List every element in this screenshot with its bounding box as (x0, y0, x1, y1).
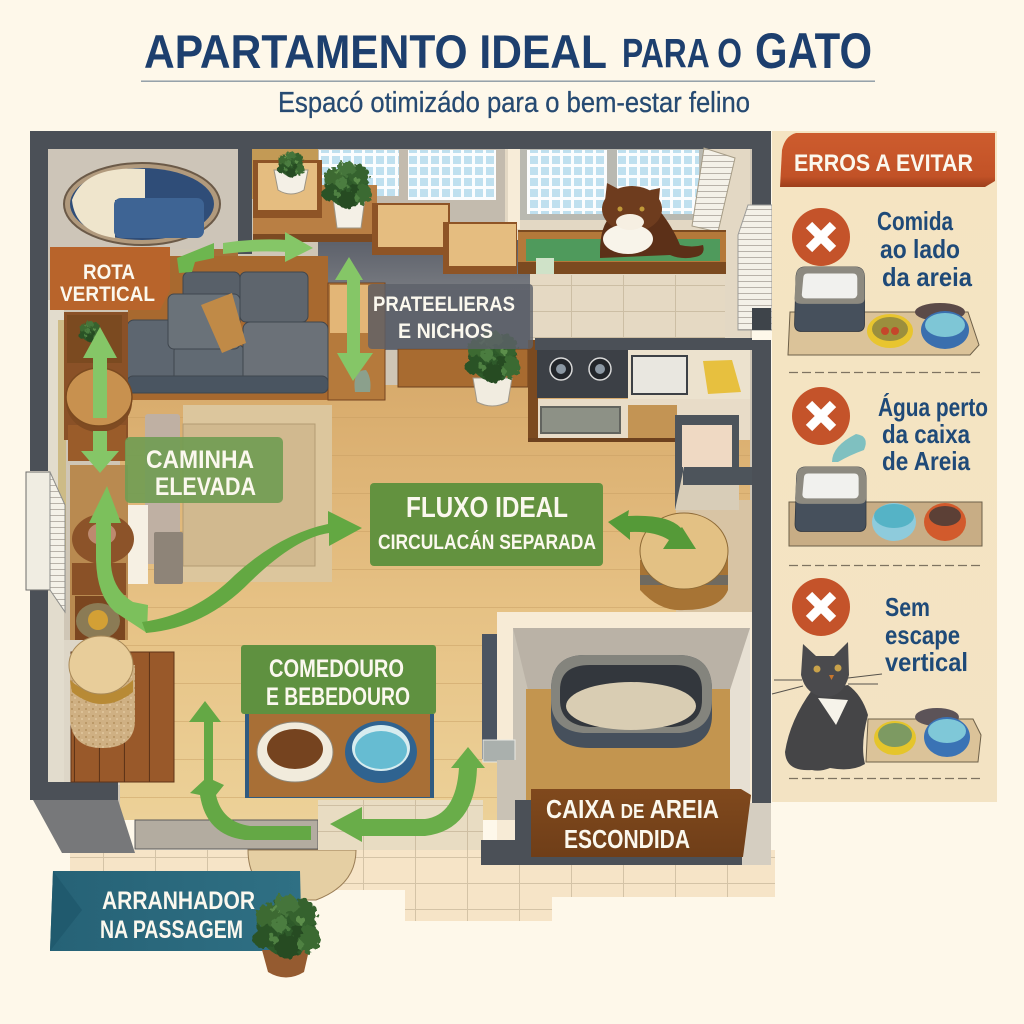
title: APARTAMENTO IDEAL (144, 25, 607, 78)
side window right (738, 205, 772, 330)
wooden scratching mat (71, 652, 174, 782)
label: fluxo ideal (370, 483, 603, 566)
arrow: shelves double (335, 257, 373, 381)
kitchen (528, 338, 752, 442)
banner (780, 133, 995, 187)
title: GATO (755, 23, 872, 79)
title: PARA O (622, 30, 742, 76)
panel: erros a evitar (772, 131, 997, 802)
sofa platform (128, 256, 528, 400)
label: arranhador na passagem (50, 871, 302, 951)
error 1: food next to litter (788, 206, 979, 355)
label: caminha elevada (125, 437, 283, 503)
label: caminha elevada: ELEVADA (155, 473, 256, 501)
bench with cushion (125, 414, 183, 584)
illustration: litter box, splash and bowls (789, 434, 982, 546)
error text: ao lado (880, 234, 960, 264)
label: prateleiras e nichos: PRATEELIERAS (373, 293, 515, 316)
x icon (792, 208, 850, 266)
error text: escape (885, 620, 960, 650)
lower left wall block (33, 800, 135, 853)
round wood stump (640, 513, 728, 610)
error text (877, 206, 972, 292)
cat bed (64, 163, 220, 245)
label: prateleiras e nichos: E NICHOS (398, 320, 493, 343)
error 3: no vertical escape (772, 578, 981, 771)
arrow: flow to stump (608, 510, 696, 549)
flow arrows (81, 232, 696, 842)
grey sofa (127, 272, 328, 393)
error text: Comida (877, 206, 953, 236)
error text (878, 392, 988, 476)
x icon (792, 387, 850, 445)
wall shelves (253, 160, 517, 274)
label: rota vertical (50, 247, 170, 310)
arrow: lower left (189, 701, 311, 840)
label: arranhador na passagem: ARRANHADOR (102, 887, 255, 915)
vertical furniture column (64, 312, 134, 640)
label: caixa de areia escondida: ESCONDIDA (564, 824, 690, 854)
label: prateleiras e nichos (368, 284, 533, 349)
arrow: vertical up (83, 327, 117, 418)
label: caminha elevada: CAMINHA (146, 446, 254, 474)
error 2: water near litter (789, 387, 988, 546)
green cat shelf (518, 230, 726, 274)
illustration: litter box and bowls (788, 267, 979, 355)
label: rota vertical: ROTA (83, 261, 135, 284)
error text: da areia (882, 262, 972, 292)
label: arranhador na passagem: NA PASSAGEM (100, 916, 243, 944)
banner: ERROS A EVITAR (794, 150, 973, 177)
error text: vertical (885, 647, 968, 677)
error text (885, 592, 968, 677)
error text: da caixa (882, 419, 970, 449)
threshold (135, 800, 483, 850)
side window left (26, 472, 65, 612)
label: caixa de areia escondida (531, 789, 751, 857)
illustration: black cat and bowls (772, 642, 981, 771)
litter box (551, 655, 712, 748)
outer walls (30, 131, 771, 803)
potted plant at entrance (253, 894, 321, 978)
label: fluxo ideal: CIRCULACÁN SEPARADA (378, 531, 596, 554)
sisal post (69, 636, 135, 748)
label: comedouro e bebedouro: E BEBEDOURO (266, 683, 410, 711)
label: caixa de areia escondida: CAIXA DE AREIA (546, 794, 719, 824)
label: rota vertical: VERTICAL (60, 283, 155, 306)
apartment floor plan (26, 131, 775, 978)
food and water tray (245, 714, 434, 798)
label: fluxo ideal: FLUXO IDEAL (406, 492, 568, 524)
brown cat on shelf (600, 183, 704, 258)
arrow: lower right (330, 747, 485, 842)
plant pots on shelves (274, 151, 372, 228)
arrow: elevated route (89, 486, 148, 633)
error text: Sem (885, 592, 930, 622)
label: comedouro e bebedouro: COMEDOURO (269, 655, 404, 683)
title (141, 23, 875, 82)
error text: de Areia (882, 446, 970, 476)
arrow: vertical down (81, 431, 119, 473)
interior wood floor (48, 149, 752, 820)
label: comedouro e bebedouro (241, 645, 436, 714)
arrow: main diagonal flow (142, 511, 362, 633)
x icon (792, 578, 850, 636)
rolled blind (692, 148, 735, 232)
subtitle: Espacó otimizádo para o bem-estar felino (278, 87, 750, 119)
litter room (481, 612, 771, 865)
error text: Água perto (878, 392, 988, 422)
small green decor (354, 370, 370, 392)
kitchen nook (675, 415, 752, 510)
large plant (466, 330, 520, 406)
windows top (319, 149, 704, 229)
outside tiled entrance (70, 850, 775, 921)
rug (183, 405, 332, 582)
arrow: top route (177, 232, 313, 273)
